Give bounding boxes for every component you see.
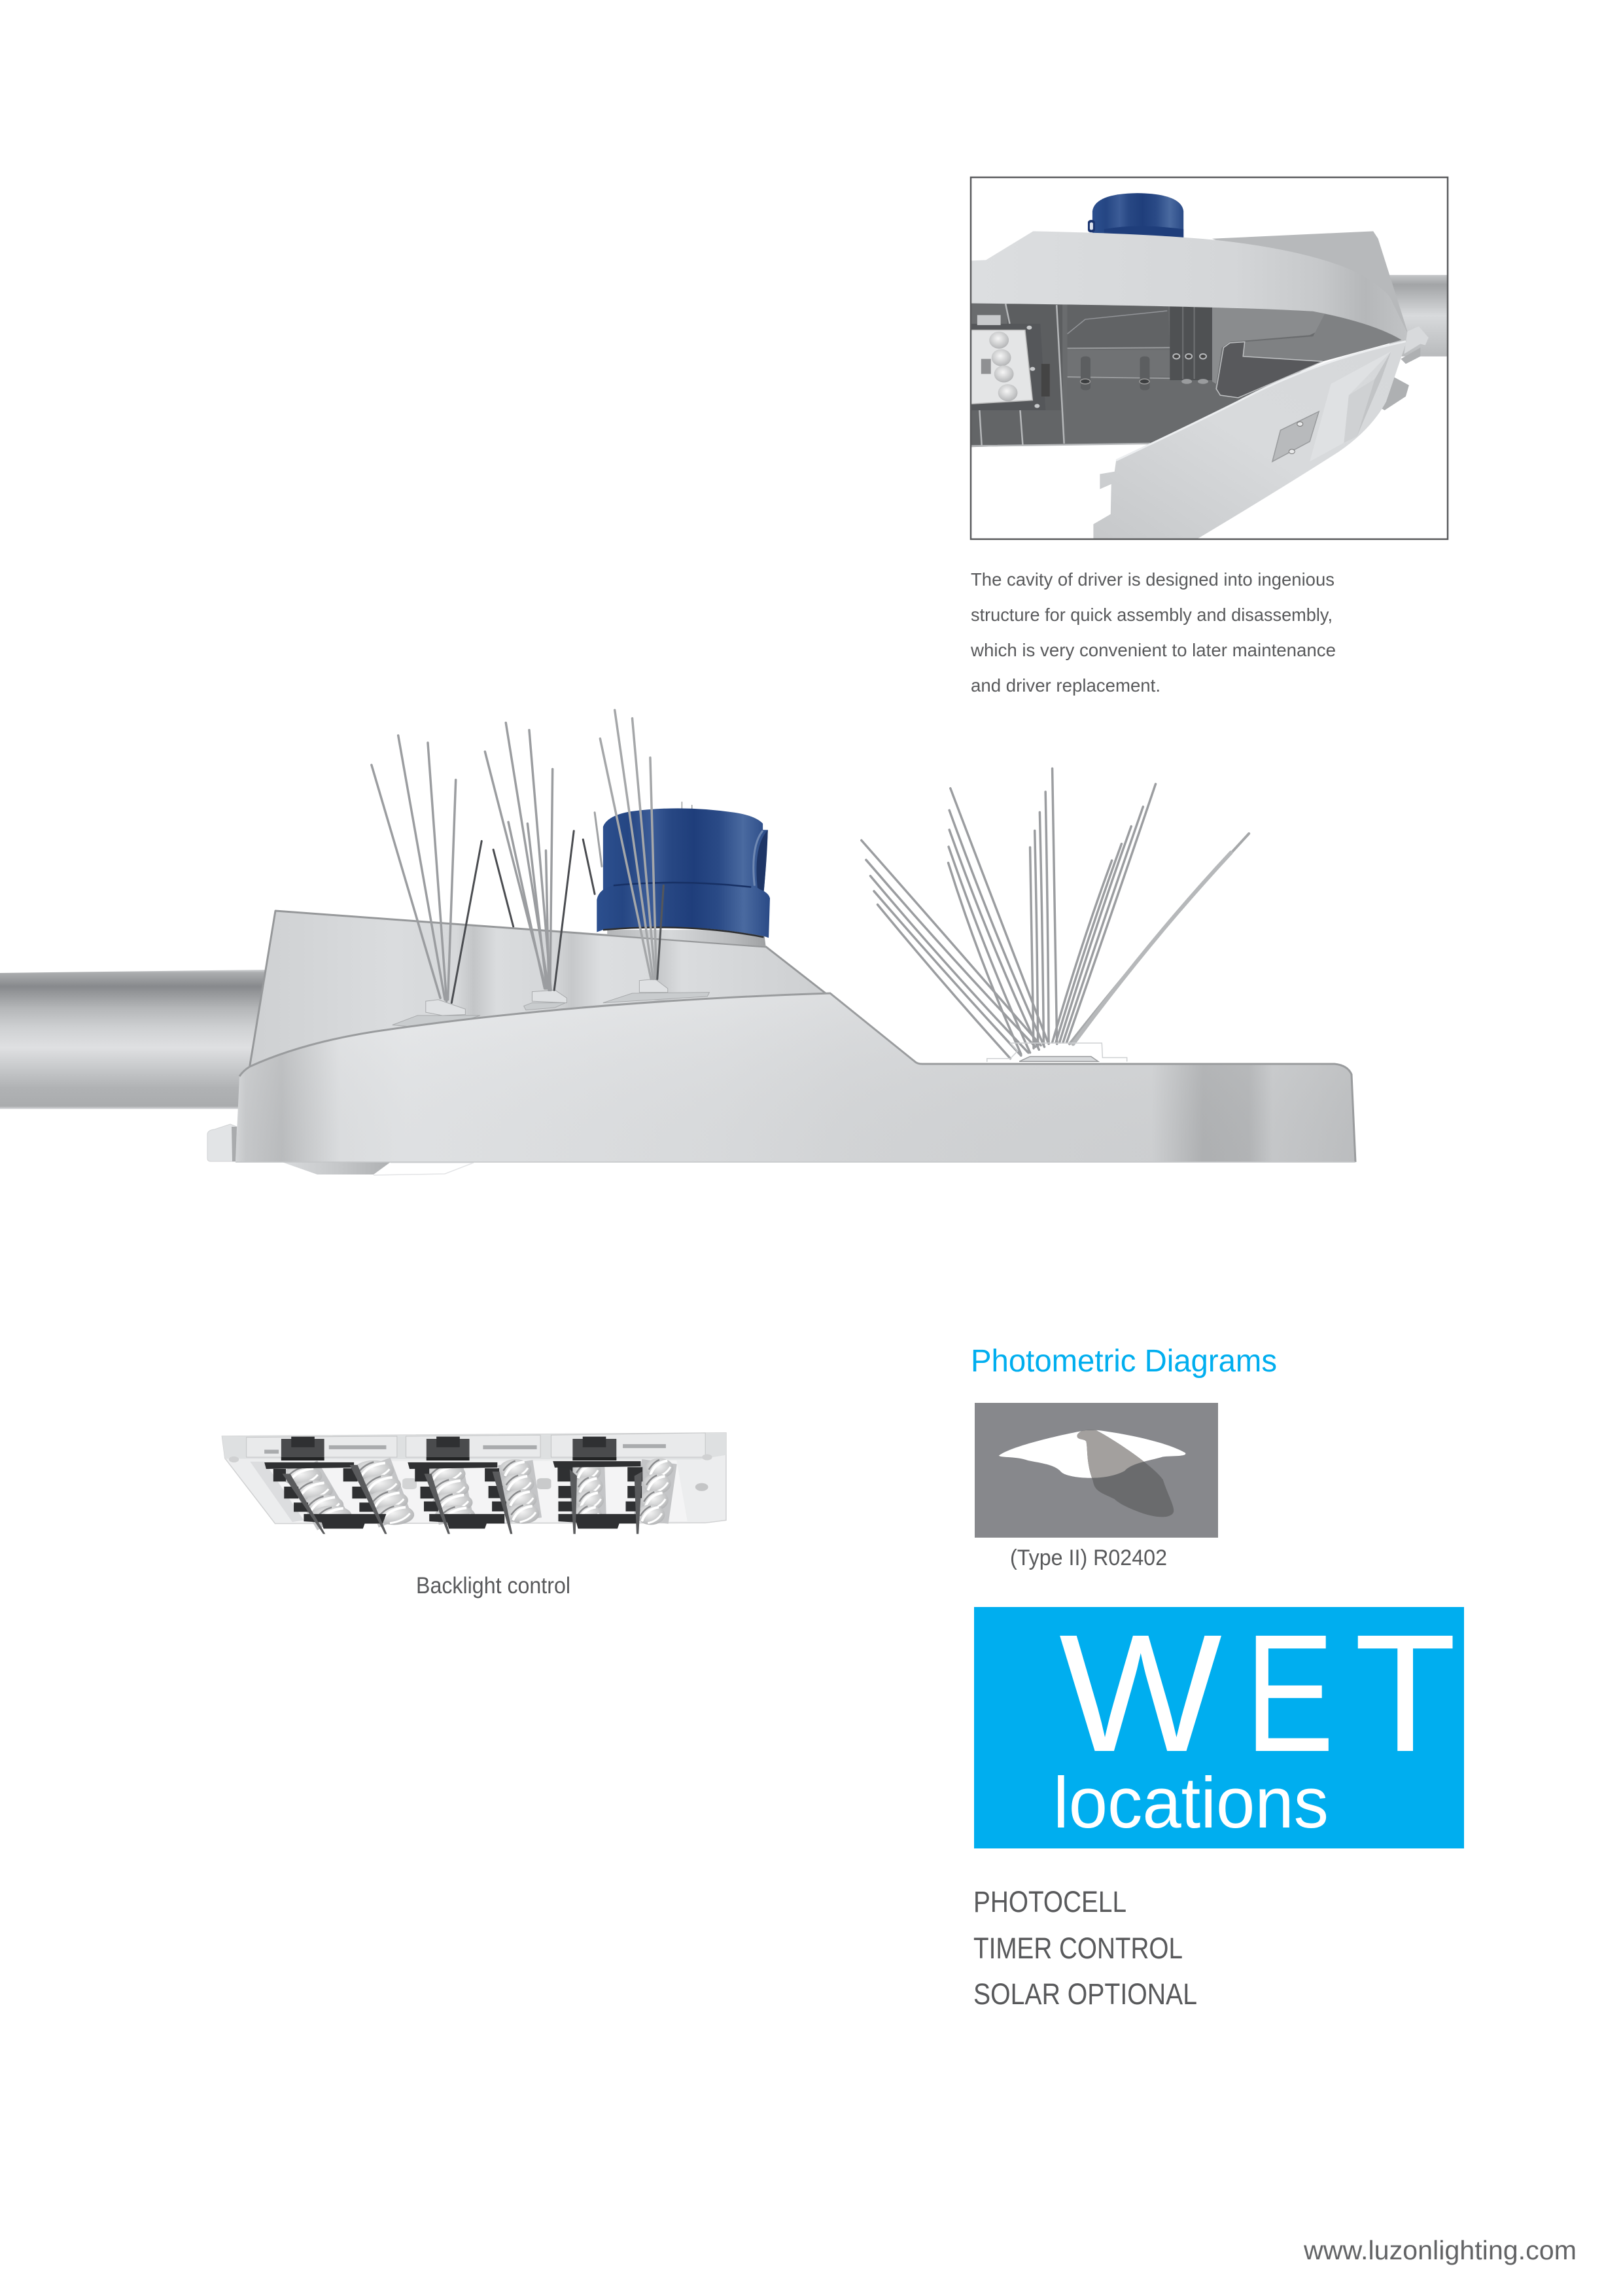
right side spike fan [862,768,1249,1061]
holder heads [281,1437,616,1460]
fan far right spike [1070,834,1249,1044]
LED module in cavity [970,315,1050,410]
fan base outline [987,1043,1127,1061]
WET lettering: W [1059,1600,1223,1787]
black holder frames [264,1461,642,1528]
backlight control lens tray [222,1433,726,1534]
WET lettering: T [1354,1600,1456,1787]
mounting pipe [1389,275,1448,357]
driver cavity description text: which is very convenient to later maintenance [970,640,1336,660]
mounting arm pipe [0,970,265,1109]
spike cluster two [485,723,574,990]
photocell ring shadow [614,883,751,887]
left bracket [207,1124,237,1161]
top cover of housing [970,231,1409,343]
photocell upper body [603,808,768,893]
lens column backing [302,1462,659,1521]
locations lettering: locations [1053,1763,1329,1843]
spike cluster three [600,710,663,979]
opened door panel [1093,342,1406,540]
WET lettering [1059,1600,1456,1787]
driver cavity description text: structure for quick assembly and disassembly, [971,605,1333,625]
rear spikes behind housing [493,802,692,927]
tray upper band [222,1433,726,1523]
lens columns [282,1458,673,1526]
tray body [222,1433,726,1523]
driver cavity photo panel [970,177,1448,540]
fan left group [862,840,1041,1059]
driver cavity description text [970,569,1336,696]
website url: www.luzonlighting.com [1303,2235,1577,2265]
distribution dark lobe [1077,1430,1174,1517]
photocell gasket [603,927,763,937]
distribution overlap [1077,1430,1143,1478]
photocell ring [597,883,770,938]
hinge clip [1404,327,1429,354]
blue photocell [597,808,770,946]
photometric chart caption: (Type II) R02402 [1010,1545,1167,1570]
WET lettering: E [1245,1600,1335,1787]
front housing body [236,993,1355,1162]
rear housing plate [249,911,826,1073]
options list: PHOTOCELL [973,1885,1126,1918]
driver cavity description text: and driver replacement. [971,675,1161,696]
rear plate [1212,231,1409,336]
underside lens trapezoid [282,1162,474,1175]
fan centre group [1030,768,1057,1048]
photometric diagrams heading: Photometric Diagrams [971,1344,1277,1379]
panel frame [971,177,1448,539]
options list [973,1885,1197,2011]
fan middle left group [949,788,1048,1054]
reflector blades [283,1465,642,1534]
open driver cavity [970,299,1406,447]
options list: SOLAR OPTIONAL [973,1977,1197,2011]
rear brackets [1378,347,1420,410]
icon: blue photocell top [1088,193,1183,239]
bird spikes on photocell side [372,710,663,1003]
chart: photometric distribution [975,1403,1218,1538]
main luminaire side view [0,710,1355,1175]
fan right group [1053,784,1156,1042]
photocell notch [754,830,768,892]
spike cluster one [372,735,481,1003]
callout: wet locations badge [974,1600,1464,1848]
backlight control caption: Backlight control [416,1573,570,1598]
photocell collar [607,930,766,946]
driver cavity description text: The cavity of driver is designed into ingenious [971,569,1335,590]
distribution white lobe [999,1430,1185,1478]
spike cluster bases [393,979,709,1027]
options list: TIMER CONTROL [973,1932,1183,1965]
